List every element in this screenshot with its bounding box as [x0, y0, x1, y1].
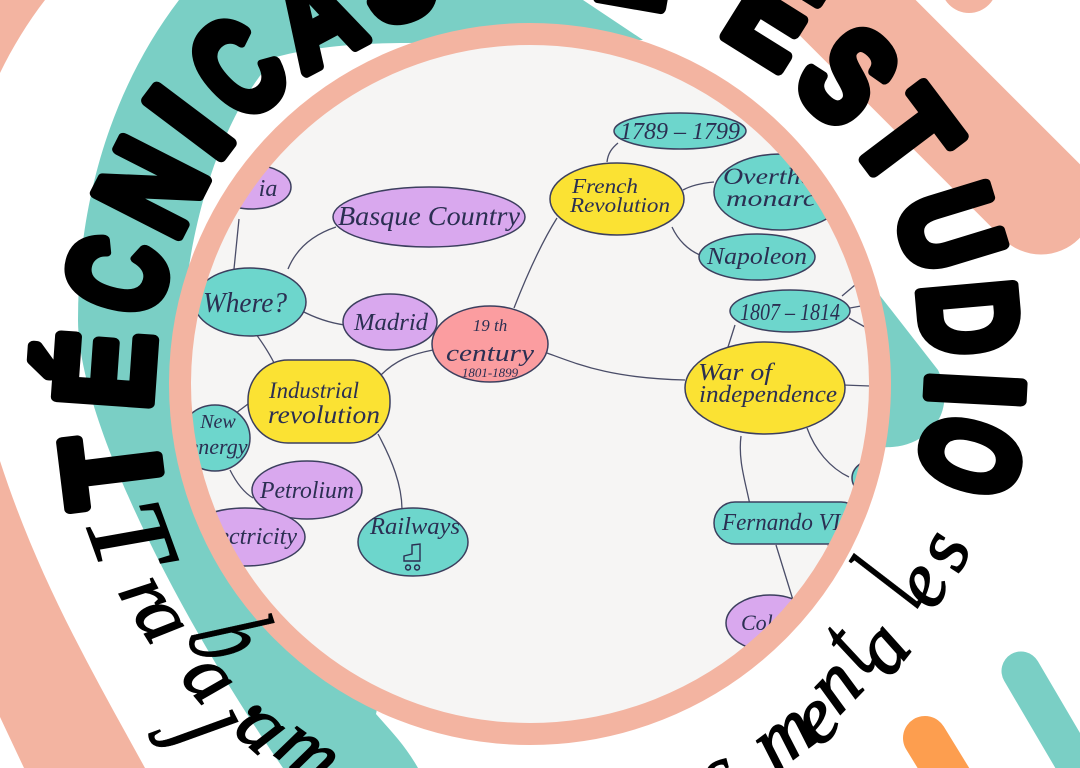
title: TÉCNICAS DE ESTUDIO: U	[867, 169, 1033, 287]
script subtitle right: s mentales: s	[895, 518, 988, 581]
node: French Revolution: French	[571, 174, 638, 198]
title: TÉCNICAS DE ESTUDIO: D	[891, 275, 1046, 361]
node: 1789 – 1799: 1789 – 1799	[620, 119, 740, 145]
background shape: teal stroke bottom right	[1021, 671, 1080, 768]
background shape: peach band bottom left	[0, 461, 145, 768]
background shape: teal arc	[78, 0, 643, 768]
script subtitle left: Trabajam: T	[60, 484, 203, 594]
node: Basque Country	[333, 187, 525, 247]
node: 19th century: 19 th	[473, 316, 507, 335]
title: TÉCNICAS DE ESTUDIO: I	[120, 64, 259, 181]
node: New energy	[192, 404, 251, 472]
script subtitle left: Trabajam: b	[161, 600, 304, 675]
node: French Revolution	[550, 163, 684, 235]
node: New energy: New	[199, 411, 236, 433]
title: TÉCNICAS DE ESTUDIO: N	[66, 118, 235, 255]
title: TÉCNICAS DE ESTUDIO: O	[888, 400, 1051, 512]
script subtitle right: s mentales: e	[771, 673, 857, 762]
node: War of independence	[685, 342, 845, 434]
node: Colon	[725, 594, 792, 646]
node: Overthrow monarchy: Overthe	[723, 164, 813, 189]
node: Madrid: Madrid	[353, 310, 429, 336]
node: 19th century: century	[446, 341, 534, 367]
background shape: orange stroke bottom right	[925, 738, 960, 768]
node: Napoleon: Napoleon	[706, 244, 807, 270]
title: TÉCNICAS DE ESTUDIO: É	[28, 327, 183, 413]
script subtitle right: s mentales: n	[788, 639, 879, 729]
node: Where?: Where?	[203, 287, 287, 319]
title: TÉCNICAS DE ESTUDIO: I	[899, 369, 1050, 411]
node: Madrid	[343, 294, 437, 350]
node: New energy: energy	[188, 434, 248, 459]
node: Industrial revolution: revolution	[268, 402, 380, 429]
node: Petrolium: Petrolium	[259, 478, 354, 504]
node: 19th century	[432, 306, 548, 382]
node: Industrial revolution: Industrial	[268, 378, 359, 403]
icon: roller skate	[404, 544, 420, 570]
background shape: peach band top right	[790, 0, 1041, 201]
node: 1807 – 1814: 1807 – 1814	[740, 300, 840, 326]
node: 19th century: 1801-1899	[462, 365, 519, 380]
node: Electricity	[216, 507, 306, 567]
node: War of independence: War of	[698, 360, 776, 386]
node: Overthrow monarchy: monarc	[726, 186, 816, 211]
node: War of independence: independence	[699, 382, 837, 408]
node: Petrolium	[252, 461, 362, 519]
circle ring	[180, 34, 880, 734]
node: Electricity: Electricity	[196, 524, 297, 550]
node: Railways	[358, 508, 468, 576]
script subtitle right: s mentales: t	[793, 600, 897, 692]
background shape: teal stroke behind circle on the right	[800, 270, 944, 447]
node: Colon: Colon	[741, 610, 795, 635]
node: 1789 – 1799	[614, 113, 746, 149]
node: Napoleon	[699, 234, 815, 280]
script subtitle right: s mentales: a	[834, 605, 928, 690]
title: TÉCNICAS DE ESTUDIO: C	[35, 222, 198, 328]
node: Industrial revolution	[248, 360, 390, 443]
script subtitle right: s mentales	[685, 518, 988, 768]
title: TÉCNICAS DE ESTUDIO: S	[770, 0, 925, 154]
node: Where?	[194, 268, 306, 336]
script subtitle left: Trabajam: a	[117, 577, 213, 658]
script subtitle right: s mentales: e	[873, 547, 967, 620]
script subtitle left: Trabajam: j	[146, 670, 290, 766]
node: Fernando VII	[714, 502, 862, 544]
node: partial teal on the right	[851, 463, 860, 486]
node: ia: ia	[259, 176, 277, 202]
node: ia	[240, 166, 292, 210]
node: French Revolution: Revolution	[569, 193, 670, 217]
script subtitle left: Trabajam: a	[165, 633, 258, 720]
script subtitle left: Trabajam	[60, 484, 360, 768]
title: TÉCNICAS DE ESTUDIO: T	[34, 426, 191, 514]
node: Railways: Railways	[369, 514, 460, 540]
node: Fernando VII: Fernando VII	[721, 510, 849, 536]
photo: hand-drawn mind map in a circle	[180, 34, 908, 734]
background shape: peach blob top	[941, 0, 997, 13]
script subtitle right: s mentales: l	[825, 540, 947, 625]
node: Basque Country: Basque Country	[338, 201, 520, 231]
title: TÉCNICAS DE ESTUDIO: T	[825, 65, 987, 211]
title: TÉCNICAS DE ESTUDIO	[28, 0, 1051, 514]
script subtitle left: Trabajam: r	[102, 558, 195, 628]
background shape: peach corner top left	[0, 0, 45, 73]
node: 1807 – 1814	[730, 290, 850, 332]
node: Overthrow monarchy	[713, 153, 826, 231]
